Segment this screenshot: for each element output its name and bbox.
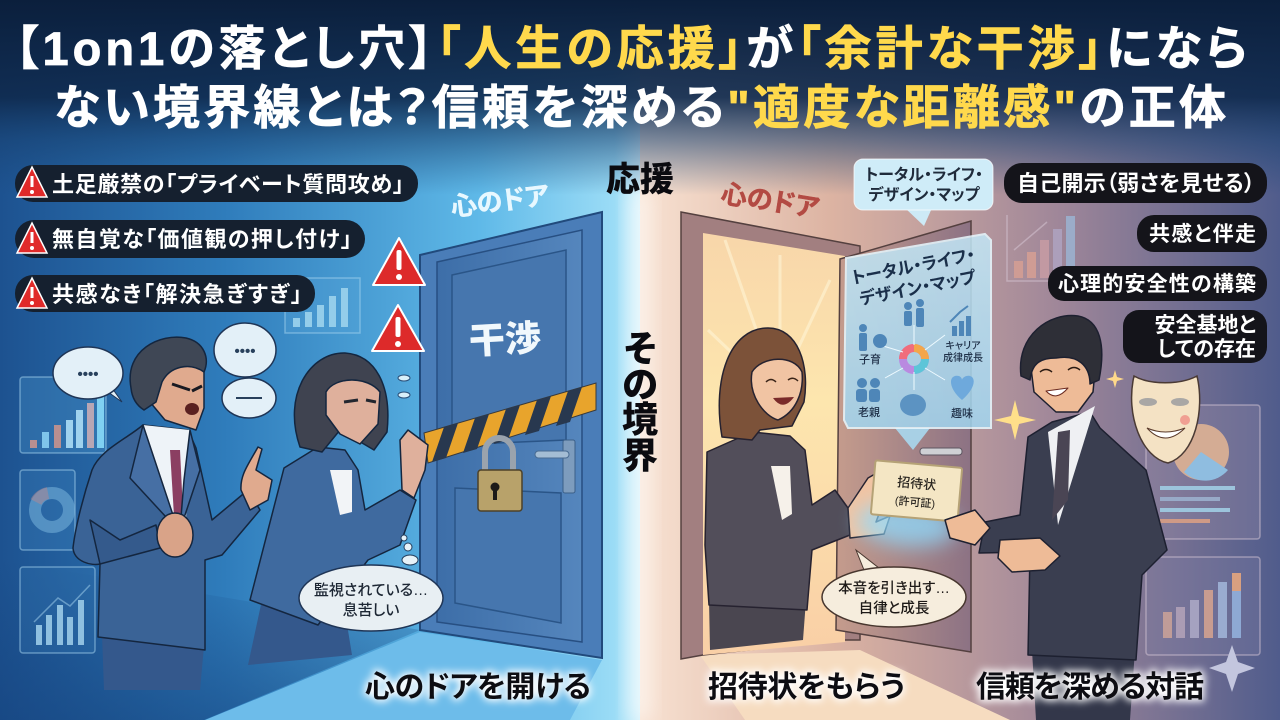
man hand giving	[945, 510, 990, 545]
bubble text: 本音を引き出す…	[838, 580, 950, 597]
icon: heart	[951, 376, 974, 400]
woman blouse	[771, 466, 792, 520]
label: career: 成律成長	[943, 351, 983, 364]
label: hobby: 趣味	[951, 406, 973, 420]
open door slab	[836, 221, 971, 652]
left bottom caption: 心のドアを開ける	[365, 671, 591, 704]
open door	[681, 212, 971, 659]
right bottom captions	[708, 671, 1204, 704]
center vertical label boundary: 境	[622, 399, 658, 440]
center vertical label boundary: の	[622, 364, 658, 405]
man brow and eye	[172, 384, 202, 391]
woman face	[751, 359, 802, 420]
pill self disclosure: 自己開示（弱さを見せる）	[1017, 171, 1255, 196]
speech bubble right	[822, 550, 966, 627]
man fist	[157, 513, 193, 557]
thought oval	[299, 565, 443, 631]
label: parents: 老親	[858, 405, 880, 419]
man hand pointing	[241, 447, 272, 510]
man left	[73, 337, 272, 690]
caption invitation: 招待状をもらう	[708, 671, 905, 704]
man eyes	[1040, 368, 1080, 372]
woman skirt	[248, 600, 352, 665]
label: career: キャリア	[945, 340, 981, 352]
hologram title: トータル・ライフ・	[850, 245, 977, 288]
right door caption: 心のドア	[719, 178, 821, 223]
man hair	[1021, 316, 1102, 384]
speech bubbles left	[53, 323, 276, 418]
woman skirt	[709, 600, 806, 650]
warning pill 3	[15, 275, 315, 312]
pill secure base	[1123, 310, 1267, 363]
title line 2: ない境界線とは？信頼を深める"適度な距離感"の正体	[54, 81, 1226, 134]
man tie	[170, 450, 183, 516]
woman right	[705, 328, 890, 650]
hologram pointer	[895, 428, 930, 450]
warning pill 3: 共感なき「解決急ぎすぎ」	[52, 282, 302, 307]
man shirt	[1048, 406, 1095, 525]
woman eyes	[766, 378, 798, 382]
card glow	[855, 498, 959, 551]
center vertical label boundary: 界	[622, 435, 658, 476]
label: child care: 子育	[859, 352, 881, 366]
woman jacket	[250, 447, 416, 625]
icon: career bars	[950, 306, 971, 336]
woman brow and eyes	[344, 400, 376, 402]
man lapel right	[180, 430, 200, 530]
woman left	[248, 353, 428, 665]
door frame	[681, 212, 860, 659]
man hand under	[998, 538, 1060, 572]
bubble text: 自律と成長	[859, 600, 930, 617]
center vertical label boundary: そ	[624, 328, 656, 369]
man face	[146, 356, 204, 430]
chart panel: bars top	[20, 377, 106, 453]
pill secure base: しての存在	[1157, 338, 1256, 361]
bubble dash	[222, 378, 276, 418]
pill self disclosure	[1004, 163, 1267, 203]
card text: (許可証)	[894, 493, 936, 511]
man smile	[1046, 388, 1068, 396]
pill empathy	[1137, 215, 1267, 252]
callout box	[854, 159, 993, 210]
man mouth	[185, 403, 199, 415]
title	[15, 22, 1247, 134]
chart panel: bars upper right	[285, 278, 360, 333]
light rays	[708, 240, 830, 370]
pill secure base: 安全基地と	[1154, 314, 1256, 337]
background: floor shading left	[0, 560, 420, 720]
man sleeve front	[90, 520, 160, 564]
chart panel: donut	[20, 470, 75, 550]
caption trust: 信頼を深める対話	[976, 671, 1204, 704]
woman jacket	[705, 432, 850, 610]
icon: family walking	[904, 299, 924, 327]
woman hand on door	[400, 430, 428, 498]
icon: care	[900, 394, 926, 416]
invitation card	[855, 459, 962, 551]
background: warm light on right floor	[700, 650, 1010, 720]
man jacket	[979, 412, 1167, 660]
thought text: 監視されている…	[314, 582, 428, 599]
hologram panel	[844, 234, 991, 428]
door frame	[420, 212, 602, 658]
woman hair	[719, 328, 806, 440]
bubble dots 2	[214, 323, 276, 377]
bubble oval	[822, 567, 966, 627]
woman hair	[294, 353, 388, 452]
pill empathy: 共感と伴走	[1149, 222, 1256, 246]
chart panel: line bars	[20, 567, 95, 653]
background: dark title band	[0, 0, 1280, 195]
chart panel: stacked bars	[1146, 557, 1260, 655]
background: left interference side	[0, 0, 640, 720]
man right	[945, 316, 1167, 720]
map callout	[854, 159, 993, 226]
man shirt	[143, 425, 190, 520]
callout text: トータル・ライフ・	[865, 166, 983, 184]
center label support: 応援	[606, 161, 674, 199]
background: light patch on left floor	[205, 632, 602, 720]
door lower panel	[455, 488, 561, 623]
padlock	[478, 438, 522, 511]
warning triangle large bottom	[372, 305, 424, 351]
bubble dots 2: ••••	[234, 343, 256, 360]
icon: smiling mask	[1132, 376, 1200, 463]
spokes	[880, 325, 945, 390]
callout pointer	[905, 208, 932, 226]
background: right support side	[640, 0, 1280, 720]
warning tape	[424, 383, 596, 463]
door handle	[535, 440, 575, 493]
bright room	[703, 233, 845, 655]
door handle	[920, 448, 962, 455]
callout text: デザイン・マップ	[868, 185, 980, 204]
pill safety: 心理的安全性の構築	[1058, 273, 1256, 296]
bubble dots 1: ••••	[77, 366, 99, 383]
background charts right	[1007, 215, 1260, 655]
man trousers	[102, 635, 205, 690]
man hair	[130, 337, 206, 410]
thought dots	[401, 535, 418, 565]
warning pill 2	[15, 220, 365, 258]
hologram title: デザイン・マップ	[858, 267, 978, 309]
warning pill 1	[15, 165, 418, 202]
life design map hologram	[844, 234, 991, 450]
card text: 招待状	[897, 474, 937, 493]
icon: child care	[859, 324, 887, 351]
thought text: 息苦しい	[343, 601, 399, 619]
closed door	[420, 212, 602, 658]
pill safety	[1048, 266, 1267, 301]
door label: 干渉	[468, 317, 542, 362]
left bottom caption: 心のドアを開ける	[365, 671, 591, 704]
background charts left	[20, 278, 360, 653]
man tie	[1052, 430, 1070, 520]
caption trust: 信頼を深める対話	[976, 671, 1204, 704]
sparkle gold	[994, 400, 1036, 440]
caption invitation: 招待状をもらう	[708, 671, 905, 704]
chart panel: pie and lines	[1146, 405, 1260, 539]
warning pill 2: 無自覚な「価値観の押し付け」	[52, 227, 352, 252]
warning list left	[15, 165, 418, 312]
bubble dots 1	[53, 347, 123, 402]
door slab	[437, 230, 582, 642]
man face	[1030, 349, 1096, 412]
card body	[871, 460, 962, 522]
woman blouse	[330, 470, 352, 515]
chart: rising bars	[1007, 215, 1075, 281]
sparkle small	[1106, 370, 1124, 388]
sparkle bottom right	[1209, 645, 1255, 692]
door upper panel	[452, 250, 566, 445]
woman hand holding card	[848, 470, 890, 538]
woman smile	[773, 397, 794, 405]
woman face	[326, 380, 380, 444]
man lapel left	[130, 425, 178, 530]
support list right	[1004, 163, 1267, 363]
left door caption: 心のドア	[449, 180, 551, 222]
man trousers	[1032, 650, 1135, 720]
icon: parents	[856, 378, 880, 402]
warning pill 1: 土足厳禁の「プライベート質問攻め」	[52, 172, 404, 197]
center vertical label boundary	[622, 328, 658, 476]
thought bubble left	[299, 535, 443, 631]
title line 1: 【1on1の落とし穴】「人生の応援」が「余計な干渉」になら	[15, 22, 1247, 75]
bubble tail	[856, 550, 884, 575]
warning triangle large top	[373, 238, 425, 285]
background: center glow	[630, 190, 650, 720]
man jacket	[73, 425, 260, 650]
center color wheel	[903, 348, 925, 370]
sweat drops	[398, 375, 410, 398]
